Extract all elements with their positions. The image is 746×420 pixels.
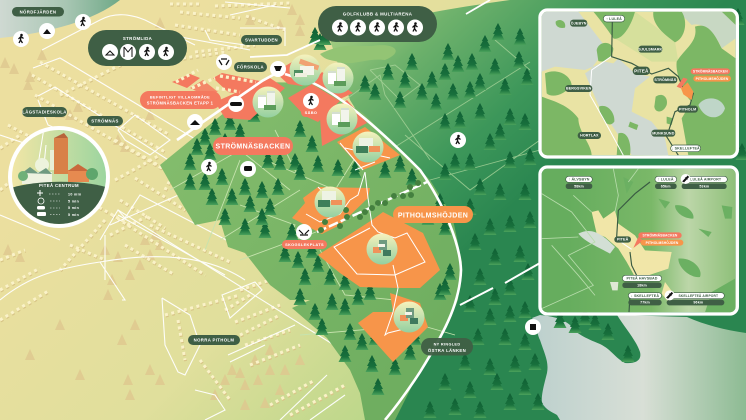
label: Norra Pitholm: NORRA PITHOLM: [194, 338, 234, 343]
inset labels: STRÖMNÄSBACKEN: [693, 70, 728, 74]
callout: Ny ringled Östra länken: ÖSTRA LÄNKEN: [428, 348, 466, 353]
circle: apartments 2: [322, 62, 354, 94]
callout: Ny ringled Östra länken: NY RINGLED: [434, 342, 460, 346]
circle: terrace 1: [352, 132, 384, 162]
callout: Befintligt villaområde: STRÖMNÄSBACKEN ETAPP 1: [147, 100, 214, 106]
inset labels: ↑ LULEÅ: [658, 177, 674, 182]
salmon plots: Strömnäsbacken: [172, 62, 367, 146]
inset labels: ↑ LULEÅ: [606, 16, 622, 21]
circle: apartments 3: [252, 86, 284, 118]
panel: Strömlida: STRÖMLIDA: [123, 36, 153, 41]
inset urban area and water: [592, 210, 672, 277]
circle: terrace 2: [314, 186, 346, 218]
inset labels: 96km: [693, 301, 704, 305]
north road: [250, 0, 490, 57]
inset labels: ÖJEBYN: [571, 20, 587, 25]
inset labels: [566, 174, 727, 305]
label: Skogslekplats: SKOGSLEKPLATS: [285, 242, 324, 247]
label: Lågstadieskola: LÅGSTADIESKOLA: [22, 110, 67, 115]
light golf course patch: [320, 45, 396, 63]
inset labels: STRÖMNÄS: [654, 77, 677, 82]
inset frame: [540, 167, 737, 314]
water: Nördfjärden: [0, 0, 120, 38]
inner green land: [160, 82, 462, 420]
inset labels: 77km: [640, 301, 651, 305]
text labels: [12, 7, 282, 345]
circle: Piteå centrum: PITEÅ CENTRUM: [39, 183, 79, 188]
inset forest patches: [542, 12, 736, 155]
yellow-area streets: [0, 2, 420, 420]
inset plots: [677, 78, 688, 88]
label: Nördfjärden: NÖRDFJÄRDEN: [20, 10, 56, 14]
panel: Golfklubb & multiarena: GOLFKLUBB & MULTIARENA: [343, 12, 413, 16]
label: Norra Pitholm: [188, 335, 240, 345]
inset labels: PITEÅ: [617, 237, 629, 242]
inset dark forest patches: [623, 177, 735, 312]
tower and town buildings: [18, 128, 98, 184]
inner paths: [170, 130, 455, 335]
inset labels: 18km: [637, 283, 648, 287]
heading: Pitholmshöjden: [393, 206, 473, 223]
building circles: [252, 54, 424, 332]
forest paths: [345, 40, 540, 190]
travel times table: 5 min: [68, 213, 79, 217]
inset labels: PITHOLM: [679, 107, 696, 111]
house rows: [0, 3, 346, 416]
inset water: [542, 12, 668, 155]
circle: Piteå centrum: [8, 126, 110, 228]
orange plots: Pitholmshöjden: [292, 127, 440, 362]
heading: Strömnäsbacken: [213, 137, 293, 155]
inset labels: BERGSVIKEN: [566, 87, 592, 91]
travel times table: 5 min: [68, 200, 79, 204]
panel: Golfklubb & multiarena: [318, 6, 437, 42]
inset labels: [565, 15, 731, 152]
lake: [532, 315, 746, 420]
label: Svartudden: [241, 35, 282, 45]
callout: Ny ringled Östra länken: [421, 338, 473, 356]
internal plot roads: [306, 143, 425, 335]
tan tree clusters: [0, 4, 305, 410]
heading: Strömnäsbacken: STRÖMNÄSBACKEN: [216, 142, 290, 150]
forest trees: [308, 8, 746, 418]
label: Såbo: [301, 108, 321, 117]
label: Såbo: SÄBO: [305, 110, 317, 115]
inset labels: ↓ SKELLEFTEÅ: [672, 146, 700, 151]
inset frame: [540, 10, 737, 157]
inset main road: [617, 182, 650, 312]
callout: Befintligt villaområde: BEFINTLIGT VILLAOMRÅDE: [150, 94, 210, 100]
inset labels: STRÖMNÄSBACKEN: [643, 234, 678, 238]
inset labels: 53km: [699, 184, 710, 188]
inset labels: 65km: [661, 184, 671, 188]
ring road: [177, 70, 461, 420]
inset labels: PITEÅ HAVSBAD: [626, 276, 658, 281]
inset map: wider region: [540, 167, 737, 314]
circle: apartments 4: [326, 104, 358, 134]
circle: villas 1: [366, 234, 398, 264]
inset thin roads: [542, 169, 638, 309]
inset labels: LULEÅ AIRPORT: [690, 177, 722, 182]
inset labels: HORTLAX: [580, 134, 599, 138]
label: Svartudden: SVARTUDDEN: [245, 38, 278, 43]
activity icons: [13, 14, 541, 335]
inset labels: PITHOLMSHÖJDEN: [696, 77, 729, 81]
callout: Befintligt villaområde: [140, 91, 221, 109]
dashed tree-lined road: [317, 180, 427, 233]
label: Strömnäs: [87, 116, 123, 126]
travel times table: [37, 190, 82, 217]
label: Förskola: [234, 62, 267, 72]
travel times table: 5 min: [68, 206, 79, 210]
inset labels: 58km: [574, 184, 585, 188]
inset labels: ↓ SKELLEFTEÅ: [631, 293, 659, 298]
houses on existing area: [176, 70, 256, 92]
inner trees: [184, 105, 456, 395]
inset labels: MUNKSUND: [652, 131, 675, 135]
heading: Pitholmshöjden: PITHOLMSHÖJDEN: [398, 210, 468, 220]
circle: apartments 1: [290, 54, 320, 86]
label: Skogslekplats: [282, 240, 327, 249]
label: Förskola: FÖRSKOLA: [237, 65, 264, 70]
label: Nördfjärden: [12, 7, 64, 16]
travel times table: 10 min: [68, 192, 82, 196]
inset labels: PITEÅ: [634, 67, 649, 73]
eastern link road: [460, 263, 540, 305]
inset labels: SKELLEFTEÅ AIRPORT: [678, 293, 718, 298]
inset roads: [612, 22, 693, 155]
eastern forest: [330, 0, 746, 420]
inset map: region: [540, 10, 737, 157]
panel: Strömlida: [88, 30, 187, 66]
circle: villas 2: [394, 302, 424, 332]
inset labels: SJULSMARK: [638, 47, 662, 51]
label: Lågstadieskola: [22, 107, 67, 117]
inset labels: PITHOLMSHÖJDEN: [646, 241, 679, 245]
label: Strömnäs: STRÖMNÄS: [91, 119, 119, 124]
inset labels: ↑ ÄLVSBYN: [568, 178, 590, 182]
